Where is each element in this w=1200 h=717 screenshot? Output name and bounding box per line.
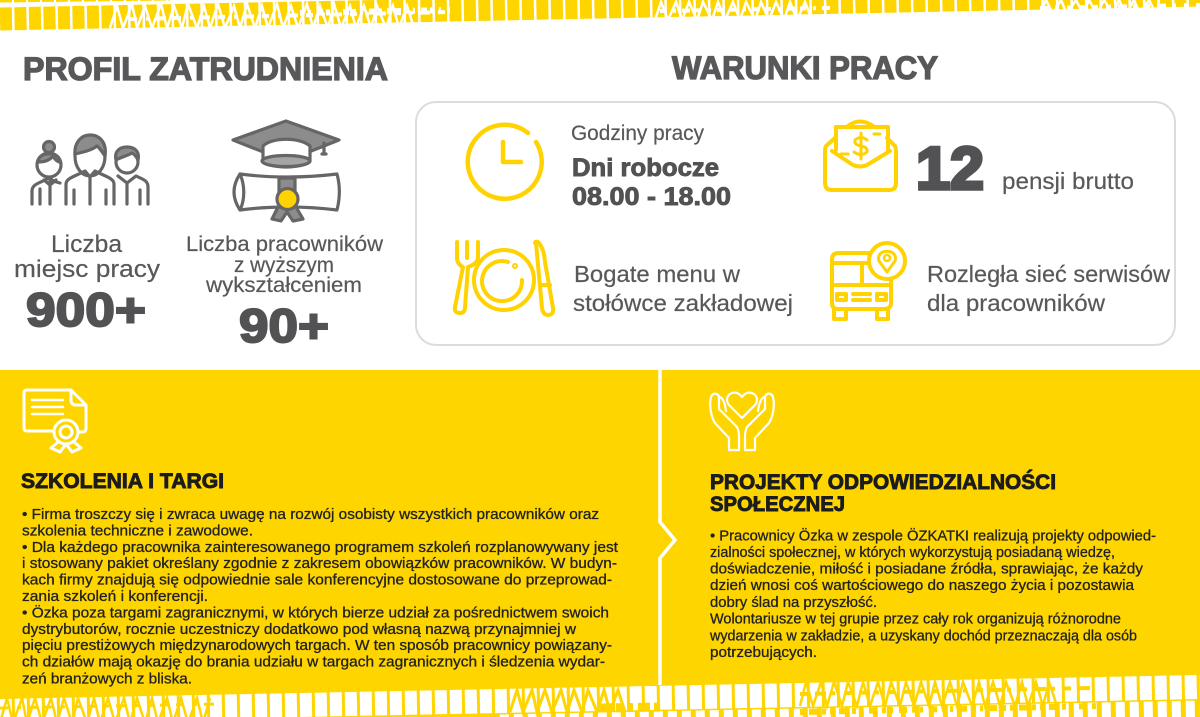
service network text: Rozległa sieć serwisów xyxy=(927,261,1171,287)
heading: szkolenia i targi: SZKOLENIA I TARGI xyxy=(21,470,224,493)
canteen text xyxy=(573,261,793,316)
icon: three employees xyxy=(32,135,148,204)
heading: warunki pracy: WARUNKI PRACY xyxy=(672,50,938,86)
heading: projekty odpowiedzialności społecznej: PROJEKTY ODPOWIEDZIALNOŚCI xyxy=(710,470,1056,494)
panel: yellow background xyxy=(0,370,1200,717)
working hours text: Dni robocze xyxy=(572,154,719,182)
service network text: dla pracowników xyxy=(927,290,1106,316)
text: szkolenia i targi: i stosowany pakiet określany zgodnie z zakresem obowiązków pracowników. W budyn- xyxy=(22,556,617,572)
text: projekty odpowiedzialności społecznej: potrzebujących. xyxy=(710,645,817,661)
heading: profil zatrudnienia: PROFIL ZATRUDNIENIA xyxy=(23,51,388,87)
icon: cutlery and plate xyxy=(455,242,553,315)
text: szkolenia i targi: szkolenia techniczne i zawodowe. xyxy=(22,523,253,539)
stat: liczba miejsc pracy: 900+ xyxy=(26,283,146,336)
heading: projekty odpowiedzialności społecznej: SPOŁECZNEJ xyxy=(710,493,845,516)
text: projekty odpowiedzialności społecznej xyxy=(709,526,1156,661)
text: projekty odpowiedzialności społecznej: zialności społecznej, w których wykorzystują posiadaną wiedzę, xyxy=(710,545,1115,561)
icon: graduation cap and diploma xyxy=(233,121,339,221)
top tire track xyxy=(0,0,1200,28)
text: szkolenia i targi: • Özka poza targami zagranicznymi, w których bierze udział za pośrednictwem swoich xyxy=(22,603,609,621)
stat: pracownicy z wyższym wykształceniem: wykształceniem xyxy=(205,274,362,297)
text: szkolenia i targi: pięciu prestiżowych międzynarodowych targach. W ten sposób pracownicy powiązany- xyxy=(22,638,612,654)
stat: liczba miejsc pracy xyxy=(14,231,160,336)
text: projekty odpowiedzialności społecznej: dzień wnosi coś wartościowego do naszego życia i pozostawia xyxy=(710,578,1135,594)
service network text xyxy=(927,261,1171,316)
divider with chevron xyxy=(660,370,675,685)
panel: warunki pracy xyxy=(416,102,1175,345)
text: projekty odpowiedzialności społecznej: Wolontariusze w tej grupie przez cały rok organizują różnorodne xyxy=(710,612,1121,628)
text: projekty odpowiedzialności społecznej: wydarzenia w zakładzie, a uzyskany dochód przeznaczają dla osób xyxy=(709,628,1137,644)
heading: projekty odpowiedzialności społecznej xyxy=(710,470,1056,516)
text: szkolenia i targi: • Dla każdego pracownika zainteresowanego programem szkoleń rozplanowywany jest xyxy=(22,540,618,556)
text: szkolenia i targi: • Firma troszczy się i zwraca uwagę na rozwój osobisty wszystkich pracowników oraz xyxy=(22,507,599,523)
icon: certificate xyxy=(24,390,86,452)
icon: envelope with money xyxy=(825,122,896,190)
canteen text: Bogate menu w xyxy=(574,261,741,287)
stat: pracownicy z wyższym wykształceniem: z wyższym xyxy=(234,254,334,277)
bottom tire track xyxy=(0,682,1200,717)
stat: pracownicy z wyższym wykształceniem xyxy=(186,233,384,352)
text: szkolenia i targi: kach firmy znajdują się odpowiednie sale konferencyjne dostosowane do przeprowad- xyxy=(22,573,612,589)
text: projekty odpowiedzialności społecznej: doświadczenie, miłość i posiadane źródła, sprawiając, że każdy xyxy=(710,562,1144,578)
stat: pracownicy z wyższym wykształceniem: Liczba pracowników xyxy=(186,233,384,256)
icon: service bus with location pin xyxy=(832,243,905,319)
stat: liczba miejsc pracy: Liczba xyxy=(51,231,123,258)
icon: hands holding heart xyxy=(710,393,774,450)
text: projekty odpowiedzialności społecznej: • Pracownicy Özka w zespole ÖZKATKI realizują projekty odpowied- xyxy=(710,526,1156,544)
stat: pracownicy z wyższym wykształceniem: 90+ xyxy=(239,299,329,352)
text: szkolenia i targi: zania szkoleń i konferencji. xyxy=(22,589,208,605)
stat: liczba miejsc pracy: miejsc pracy xyxy=(14,256,160,283)
text: szkolenia i targi xyxy=(22,507,618,688)
working hours text xyxy=(571,122,731,211)
text: szkolenia i targi: zeń branżowych z bliska. xyxy=(22,672,192,688)
text: projekty odpowiedzialności społecznej: dobry ślad na przyszłość. xyxy=(710,595,877,611)
canteen text: stołówce zakładowej xyxy=(573,290,793,316)
salary: 12 pensji brutto xyxy=(916,135,1134,202)
text: szkolenia i targi: dystrybutorów, rocznie uczestniczy dodatkowo pod własną nazwą przynajmniej w xyxy=(22,622,577,638)
icon: clock xyxy=(468,125,542,199)
salary: 12 pensji brutto: 12 xyxy=(916,135,984,202)
working hours text: 08.00 - 18.00 xyxy=(572,183,731,211)
working hours text: Godziny pracy xyxy=(571,122,704,145)
salary: 12 pensji brutto: pensji brutto xyxy=(1002,168,1134,194)
text: szkolenia i targi: ch działów mają okazję do brania udziału w targach zagranicznych i śledzenia wydar- xyxy=(22,655,605,671)
